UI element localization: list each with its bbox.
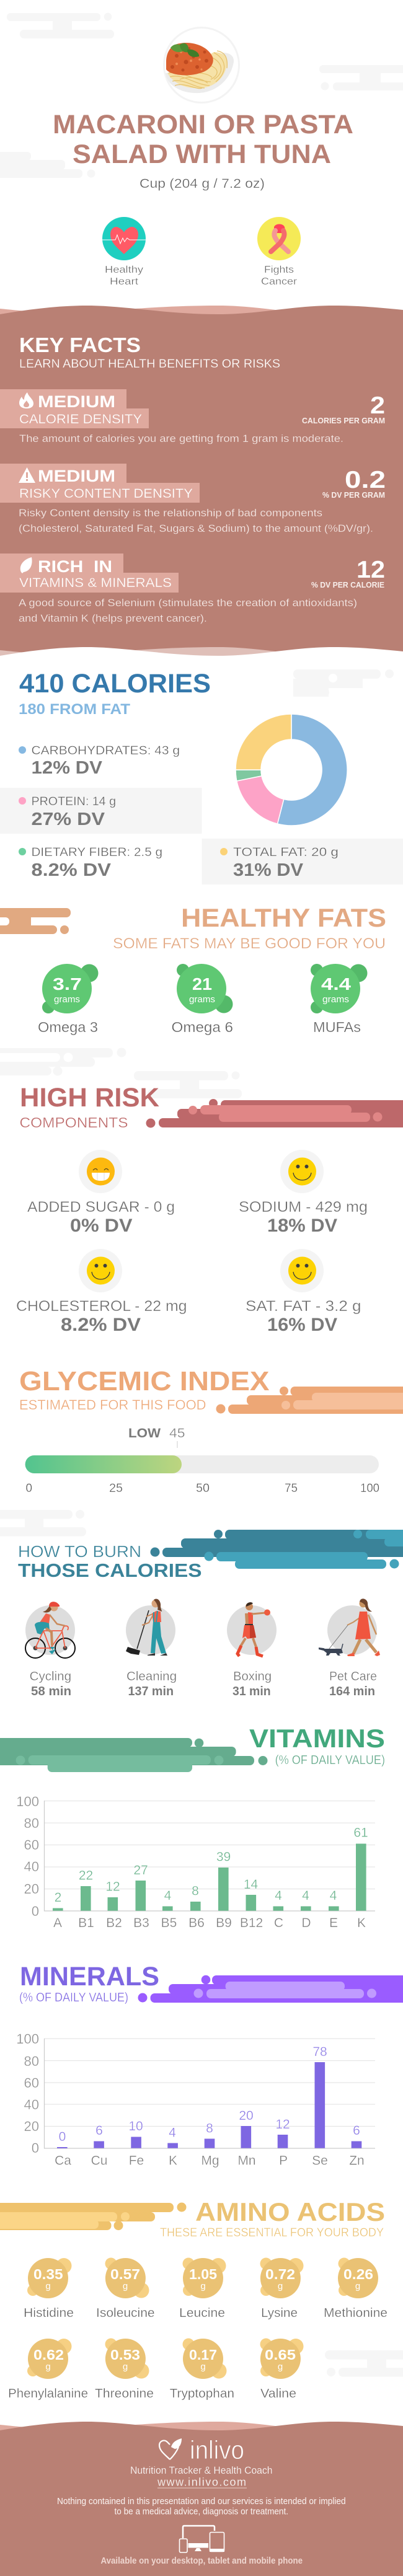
fact: rich in vitamins and minerals: % DV PER CALORIE [311,580,384,589]
panel: healthy fats [0,903,386,1035]
risk: cholesterol [16,1249,187,1335]
bar chart: minerals: 6 [353,2124,360,2138]
bar chart: vitamins: B3 [133,1916,149,1930]
bar chart: minerals: Mg [201,2153,219,2168]
bar chart: vitamins: B1 [78,1916,94,1930]
amino: histidine: Histidine [24,2306,74,2320]
bar chart: vitamins: 0 [32,1903,39,1919]
heading: calories: 410 CALORIES [19,669,211,699]
disclaimer [57,2496,346,2517]
amino: phenylalanine [8,2339,88,2401]
icon: fights cancer [257,217,301,260]
amino: lysine: Lysine [261,2306,298,2320]
amino: methionine: 0.26 [343,2266,373,2282]
bar chart: vitamins [16,1794,375,1930]
amino: tryptophan: Tryptophan [170,2387,234,2401]
bubble: omega 3 [38,964,98,1035]
heading: amino acids: AMINO ACIDS [195,2197,385,2226]
bar chart: vitamins: 4 [330,1889,337,1903]
heading: key facts: LEARN ABOUT HEALTH BENEFITS OR RISKS [19,357,280,371]
bar chart: minerals: 80 [24,2053,39,2069]
risk: saturated fat: 16% DV [267,1315,337,1335]
decoration: healthy fats cloud [0,908,71,934]
icon: healthy heart [102,217,146,260]
amino: histidine: g [45,2281,51,2291]
legend: total fat: 31% DV [233,860,304,880]
bubble: mufas: MUFAs [313,1019,361,1035]
activity labels: cleaning [126,1670,177,1698]
tagline: Nutrition Tracker & Health Coach [130,2464,273,2476]
fact: risky content density: % DV PER GRAM [322,490,385,500]
panel: key facts [0,306,403,670]
bar chart: vitamins: B5 [161,1916,177,1930]
amino: histidine [24,2258,74,2320]
bar chart: minerals: Fe [129,2153,144,2168]
panel: vitamins [0,1724,385,1930]
panel: high risk components [0,1048,403,1335]
fact: risky content density: (Cholesterol, Saturated Fat, Sugars & Sodium) to the amount (%DV/gr). [19,523,373,534]
title: SALAD WITH TUNA [73,139,331,169]
heading: minerals: MINERALS [20,1962,159,1992]
amino: phenylalanine: Phenylalanine [8,2387,88,2401]
activity labels: pet care: Pet Care [329,1670,377,1683]
gauge bar [25,1455,379,1473]
risk: added sugar: ADDED SUGAR - 0 g [27,1199,175,1215]
panel: calories [0,669,403,884]
icon: devices [180,2526,224,2552]
gauge scale: 75 [285,1482,298,1495]
amino: leucine: Leucine [179,2306,225,2320]
bar chart: vitamins: 80 [24,1815,39,1831]
glycemic value [128,1426,185,1448]
amino: valine [260,2338,304,2401]
activity: cleaning [126,1599,175,1656]
bar chart: minerals: 8 [206,2121,213,2136]
bar chart: minerals: 78 [312,2045,327,2059]
icon: warning [19,467,35,483]
activity labels: cleaning: Cleaning [126,1670,177,1683]
bubble: omega 3: 3.7 [53,974,82,994]
heading: vitamins: VITAMINS [249,1724,385,1753]
fact: rich in vitamins and minerals: RICH IN [38,557,112,576]
bar chart: minerals: 4 [169,2126,176,2140]
bar chart: vitamins: 22 [79,1868,93,1883]
heading: how to burn those calories: THOSE CALORIES [18,1559,202,1581]
activity: pet care [319,1599,380,1656]
fact: rich in vitamins and minerals: and Vitamin K (helps prevent cancer). [19,612,207,624]
bubble: mufas [311,964,367,1035]
benefit label: fights cancer: Fights [264,265,294,275]
disclaimer: Nothing contained in this presentation and our services is intended or implied [57,2496,346,2507]
heading: glycemic index [19,1366,270,1413]
legend: dietary fiber: 8.2% DV [31,860,112,880]
legend: carbohydrates: CARBOHYDRATES: 43 g [31,744,180,757]
amino: methionine: g [355,2281,360,2291]
bubble: mufas: 4.4 [321,974,352,994]
fact: risky content density: RISKY CONTENT DENSITY [19,487,193,501]
bar chart: vitamins: E [329,1916,338,1930]
activity labels: boxing: Boxing [233,1670,272,1683]
bar chart: vitamins: A [53,1916,62,1930]
title [53,110,353,169]
website link: www.inlivo.com [157,2476,246,2488]
heading: high risk: HIGH RISK [20,1083,159,1113]
activity labels: cycling [30,1670,71,1698]
bar chart: minerals: 0 [59,2130,66,2144]
fact: calorie density: CALORIE DENSITY [19,412,142,426]
decoration: vitamins cloud [0,1738,268,1772]
activity labels: cycling: 58 min [31,1685,71,1698]
fact: rich in vitamins and minerals: VITAMINS & MINERALS [19,576,172,590]
amino: threonine: g [123,2362,128,2372]
availability note: Available on your desktop, tablet and mobile phone [100,2556,303,2566]
amino: lysine [260,2257,304,2320]
heading: how to burn those calories: HOW TO BURN [18,1542,141,1561]
benefit label: fights cancer [261,265,298,287]
bar chart: vitamins: 60 [24,1837,39,1853]
heading: amino acids: THESE ARE ESSENTIAL FOR YOUR BODY [160,2226,384,2239]
risk: saturated fat [246,1249,361,1335]
amino: isoleucine: 0.57 [110,2266,140,2282]
glycemic value: 45 [169,1426,185,1440]
heading: calories: 180 FROM FAT [19,701,130,718]
activity labels: boxing [232,1670,272,1698]
bar chart: vitamins: K [357,1916,366,1930]
icon: leaf [20,557,32,573]
bubble: omega 6: 21 [192,974,212,994]
activity labels: pet care [329,1670,377,1698]
bar chart: vitamins: 20 [24,1881,39,1897]
bar chart: vitamins: C [274,1916,283,1930]
bar chart: minerals: 40 [24,2097,39,2112]
logo: inlivo: inlivo [190,2435,244,2464]
amino: lysine: g [278,2281,283,2291]
legend: total fat: TOTAL FAT: 20 g [233,845,339,859]
bar chart: vitamins: 8 [192,1884,199,1898]
fact: calorie density: 2 [370,392,385,419]
icon: flame [19,392,33,408]
bar chart: minerals: Mn [237,2153,256,2168]
title: MACARONI OR PASTA [53,110,353,139]
amino: leucine: 1.05 [189,2266,217,2282]
risk: cholesterol: 8.2% DV [61,1315,141,1335]
heading: healthy fats [113,903,386,952]
bar chart: minerals: 12 [275,2117,290,2132]
amino: valine: 0.65 [265,2347,296,2363]
benefit label: fights cancer: Cancer [261,276,298,287]
bar chart: vitamins: 40 [24,1859,39,1874]
heading: high risk: COMPONENTS [20,1114,128,1131]
bar chart: vitamins: 4 [302,1889,309,1903]
amino: tryptophan: 0.17 [189,2347,217,2363]
legend: protein: PROTEIN: 14 g [31,795,116,808]
bubble: omega 6: grams [189,994,215,1005]
bar chart: minerals: 6 [95,2124,103,2138]
donut chart [236,714,347,826]
risk: added sugar: 0% DV [70,1215,133,1236]
amino: valine: g [278,2362,283,2372]
amino: valine: Valine [260,2387,296,2401]
benefit label: healthy heart: Heart [110,276,139,287]
glycemic value: LOW [128,1426,161,1440]
amino: threonine [95,2338,154,2401]
risk: cholesterol: CHOLESTEROL - 22 mg [16,1298,187,1315]
amino: leucine: g [200,2281,206,2291]
amino: leucine [179,2257,226,2320]
heading: minerals [19,1962,159,2005]
amino: tryptophan: g [200,2362,206,2372]
bar chart: vitamins: B9 [216,1916,232,1930]
decoration: amino cloud [0,2203,186,2230]
heading: glycemic index: GLYCEMIC INDEX [19,1366,270,1396]
decoration: burn cloud [150,1530,403,1569]
bubble: omega 3: Omega 3 [38,1019,98,1035]
bar chart: vitamins: D [301,1916,311,1930]
risk: sodium: 18% DV [267,1215,337,1236]
bar chart: vitamins: B2 [106,1916,122,1930]
legend: dietary fiber [19,845,162,880]
panel: footer [0,2422,403,2576]
fact: calorie density: MEDIUM [38,392,115,411]
bar chart: minerals: 10 [128,2119,143,2133]
bar chart: vitamins: 14 [244,1877,258,1892]
bar chart: vitamins: 4 [164,1889,172,1903]
amino: phenylalanine: g [45,2362,51,2372]
bubble: omega 3: grams [54,994,80,1005]
bar chart: minerals: Cu [91,2153,107,2168]
bar chart: vitamins: B12 [240,1916,263,1930]
fact: calorie density: The amount of calories you are getting from 1 gram is moderate. [19,433,343,444]
serving size: Cup (204 g / 7.2 oz) [140,177,265,191]
gauge scale: 25 [109,1482,123,1495]
amino: isoleucine [96,2257,155,2320]
activity labels: boxing: 31 min [232,1685,271,1698]
fact: risky content density: Risky Content density is the relationship of bad components [19,507,322,519]
amino: histidine: 0.35 [33,2266,63,2282]
bar chart: minerals: 20 [24,2119,39,2134]
bar chart: minerals: P [279,2153,288,2168]
bar chart: minerals: 60 [24,2075,39,2091]
activity: cycling [25,1602,75,1658]
gauge scale: 0 [26,1482,32,1495]
decoration: minerals cloud [138,1975,403,2003]
disclaimer: to be a medical advice, diagnosis or treatment. [114,2507,288,2517]
gauge scale: 50 [196,1482,210,1495]
panel: glycemic index [19,1366,403,1495]
activity labels: cycling: Cycling [30,1670,71,1683]
heading: key facts [19,333,280,371]
heading: glycemic index: ESTIMATED FOR THIS FOOD [19,1397,206,1413]
panel: how to burn calories [0,1510,403,1698]
panel: header [0,13,403,287]
risk: sodium [239,1150,368,1236]
amino: lysine: 0.72 [265,2266,295,2282]
amino: phenylalanine: 0.62 [33,2347,64,2363]
amino: methionine: Methionine [324,2306,388,2320]
legend: carbohydrates: 12% DV [31,758,103,778]
activity labels: cleaning: 137 min [128,1685,174,1698]
heading: vitamins: (% OF DAILY VALUE) [275,1753,385,1767]
bar chart: vitamins: 12 [105,1879,120,1894]
bubble: omega 6: Omega 6 [171,1019,233,1035]
fact: risky content density: 0.2 [345,467,386,493]
risk: added sugar [27,1150,175,1236]
amino: threonine: 0.53 [110,2347,140,2363]
bar chart: vitamins: 4 [275,1889,282,1903]
bar chart: minerals: 100 [16,2031,39,2047]
bar chart: vitamins: 2 [55,1890,61,1905]
fact: risky content density: MEDIUM [38,467,115,485]
heading: amino acids [160,2197,385,2239]
image: plate of pasta [164,27,239,103]
legend: protein: 27% DV [31,809,105,829]
legend: protein [19,795,116,829]
decoration: glycemic cloud [216,1387,403,1414]
heading: high risk [20,1083,159,1131]
amino: isoleucine: Isoleucine [96,2306,155,2320]
amino: methionine [324,2257,388,2320]
bar chart: vitamins: B6 [188,1916,205,1930]
activity: boxing [227,1602,277,1656]
gauge scale: 100 [360,1482,379,1495]
bar chart: minerals: 20 [239,2109,254,2123]
legend: carbohydrates [19,744,180,778]
legend: dietary fiber: DIETARY FIBER: 2.5 g [31,845,162,859]
bar chart: minerals: 0 [32,2140,39,2156]
bar chart: minerals: Se [312,2153,328,2168]
fact: rich in vitamins and minerals: 12 [356,557,385,583]
heading: minerals: (% OF DAILY VALUE) [19,1991,128,2005]
bar chart: minerals: K [169,2153,177,2168]
legend: total fat [220,845,339,880]
gauge scale [26,1482,379,1495]
panel: minerals [16,1962,403,2168]
benefit label: healthy heart: Healthy [105,265,143,275]
heading: key facts: KEY FACTS [19,333,141,356]
fact: rich in vitamins and minerals [0,554,385,624]
heading: vitamins [249,1724,385,1767]
bar chart: minerals [16,2031,375,2168]
logo: inlivo [159,2435,244,2464]
fact: risky content density [0,464,386,534]
risk: saturated fat: SAT. FAT - 3.2 g [246,1298,361,1315]
amino: isoleucine: g [123,2281,128,2291]
amino: threonine: Threonine [95,2387,154,2401]
benefit label: healthy heart [105,265,143,287]
bar chart: minerals: Ca [55,2153,71,2168]
heading: healthy fats: SOME FATS MAY BE GOOD FOR YOU [113,935,386,952]
bar chart: vitamins: 27 [133,1863,148,1877]
bar chart: vitamins: 61 [353,1826,368,1840]
risk: sodium: SODIUM - 429 mg [239,1199,368,1215]
fact: calorie density [0,389,385,444]
fact: calorie density: CALORIES PER GRAM [302,416,385,425]
heading: calories [19,669,211,718]
heading: healthy fats: HEALTHY FATS [181,903,386,932]
activity labels: pet care: 164 min [329,1685,375,1698]
fact: rich in vitamins and minerals: A good source of Selenium (stimulates the creation of antioxidants) [19,597,357,609]
bar chart: minerals: Zn [349,2153,365,2168]
heading: how to burn those calories [18,1542,202,1581]
bar chart: vitamins: 39 [216,1850,231,1864]
decoration: high risk cloud [146,1099,403,1128]
amino: tryptophan [170,2338,234,2401]
bubble: omega 6 [171,964,233,1035]
bar chart: vitamins: 100 [16,1794,39,1809]
panel: amino acids [0,2197,403,2401]
bubble: mufas: grams [322,994,349,1005]
